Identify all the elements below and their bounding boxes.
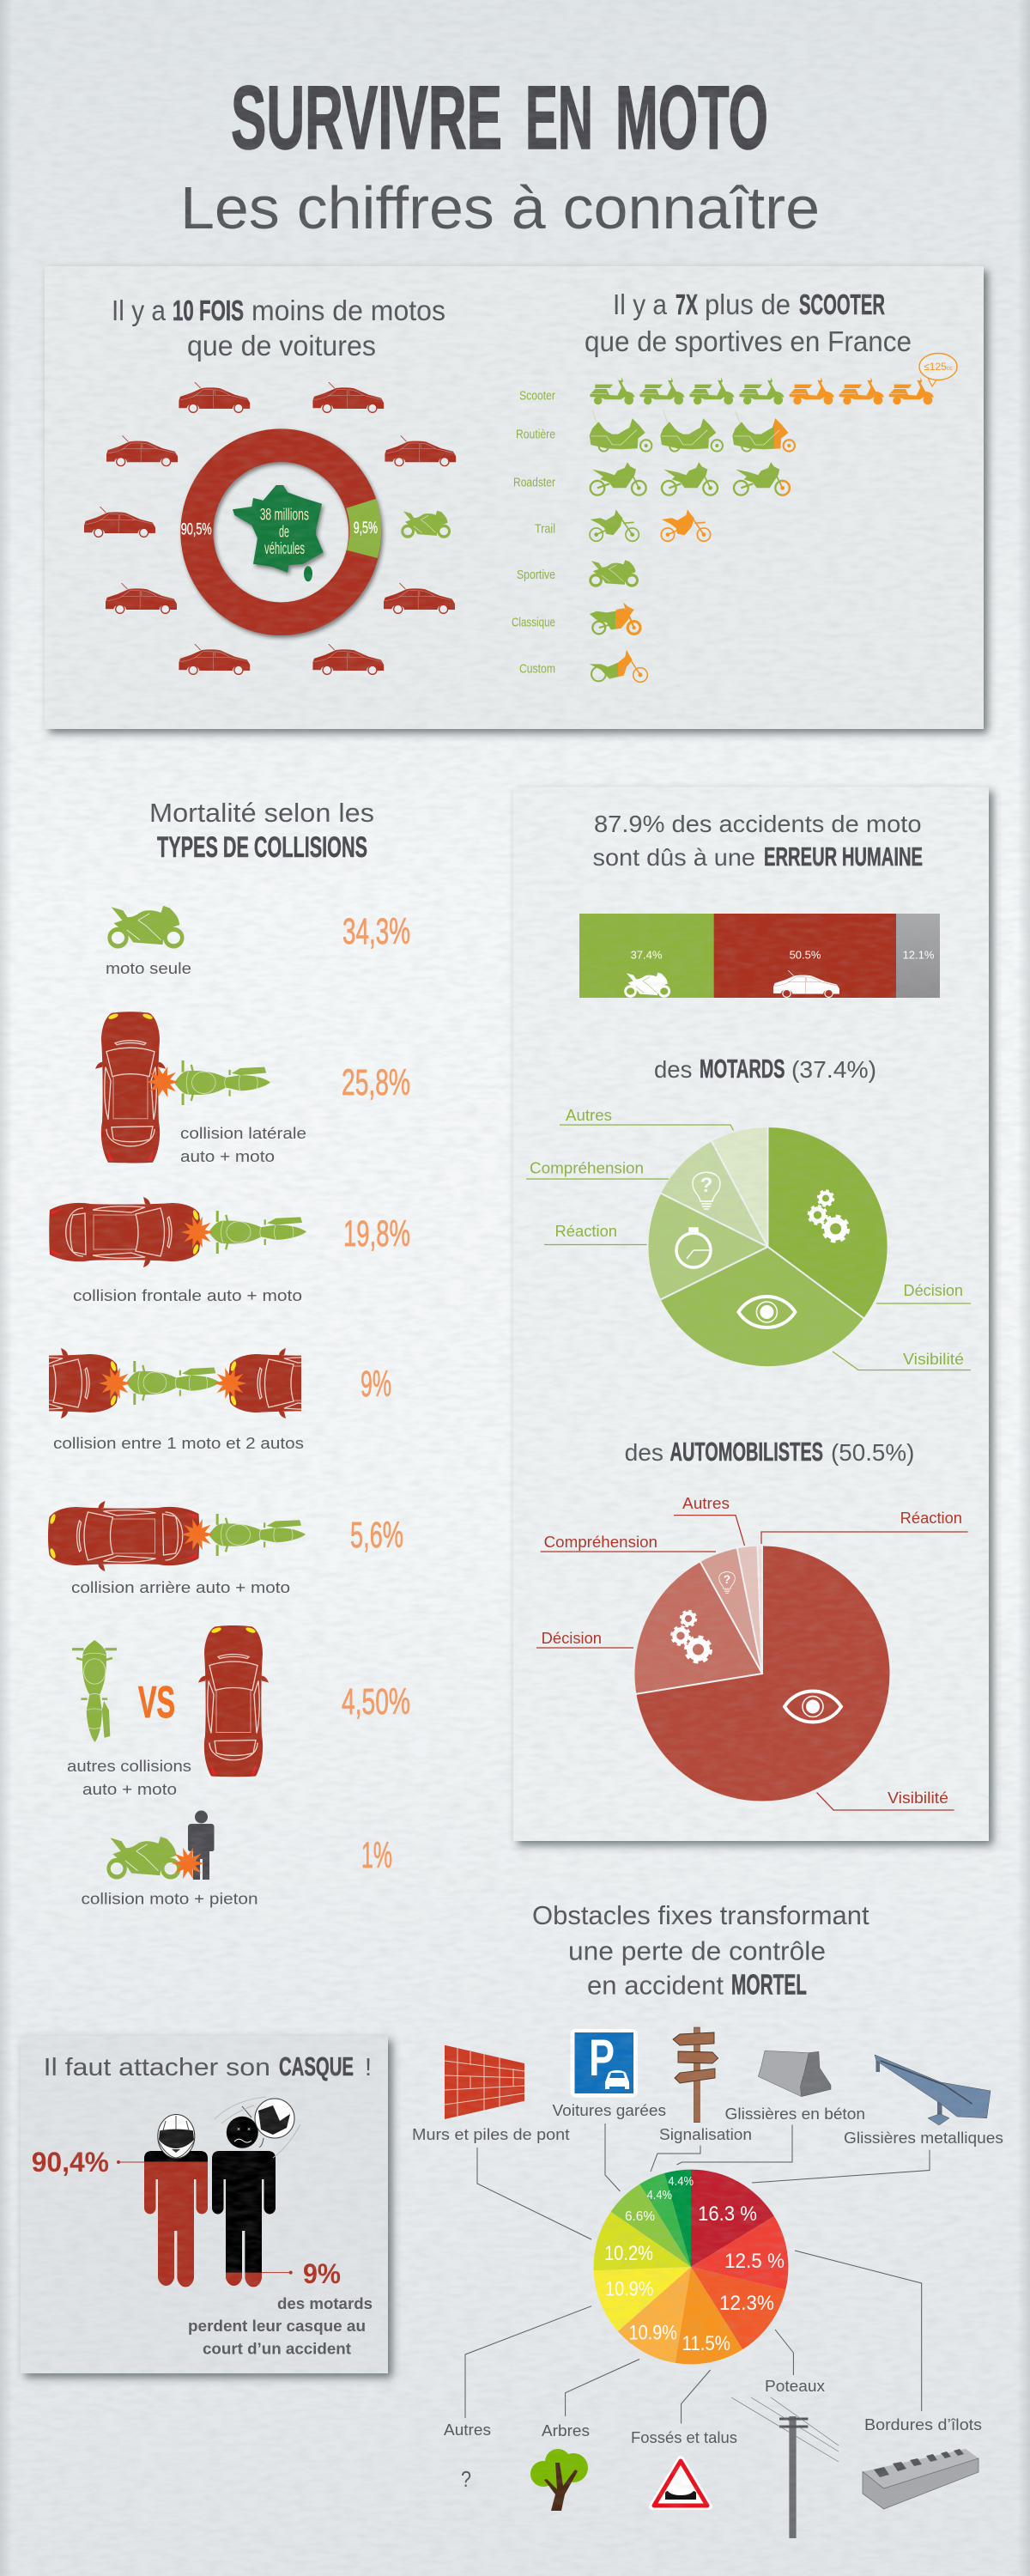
row: collision arrière [48,1501,403,1596]
map: France: de [279,524,289,542]
figure: motard sans casque: × [237,2127,240,2133]
labels: automobilistes pie: Visibilité [888,1789,948,1807]
heading: 7X scooter: SCOOTER [799,289,885,320]
row: Roadster [513,462,790,495]
labels: motards pie: Autres [566,1107,612,1124]
heading: 7X scooter: plus de [705,289,791,320]
stacked bar: 12.1% [903,948,935,962]
pie chart: obstacles: 10.2% [604,2242,653,2265]
row: autres collisions: autres collisions [67,1758,191,1775]
icon: signpost [673,2027,718,2123]
heading: casque: Il faut attacher son [44,2054,270,2081]
labels: obstacles: Signalisation [659,2126,752,2143]
row: autres collisions [67,1625,410,1798]
pie chart: motards [647,1127,888,1367]
map: France: véhicules [264,540,305,558]
map: France [233,485,324,581]
heading: 10 fois [112,295,445,361]
row: 1 moto et 2 autos [49,1348,391,1449]
row: 1 moto et 2 autos: collision entre 1 moto et 2 autos [53,1435,304,1452]
heading: motards: MOTARDS [700,1054,785,1084]
icon: tree [530,2449,588,2511]
row: autres collisions: VS [138,1678,175,1728]
heading: casque [44,2051,372,2081]
donut chart [180,428,381,635]
row: Routière: Routière [516,428,555,442]
labels: automobilistes pie: Réaction [900,1510,962,1527]
labels: obstacles: Glissières en béton [724,2105,865,2123]
pie chart: obstacles: 4.4% [668,2174,694,2189]
section: obstacles fixes [412,1900,1003,2538]
text: perdent leur casque [188,2295,373,2358]
row: collision frontale [49,1197,410,1304]
row: Custom: Custom [519,661,555,676]
row: collision frontale: collision frontale auto + moto [73,1287,302,1304]
icons: cars around the donut [84,382,456,674]
heading: obstacles: MORTEL [731,1968,807,2001]
labels: obstacles: Autres [444,2421,491,2439]
row: collision latérale: collision latérale [180,1125,306,1142]
row: Sportive: Sportive [517,568,555,582]
title: EN [525,68,593,168]
row: moto seule [106,906,410,977]
row: Trail [535,509,711,541]
title: MOTO [615,68,768,168]
figure: motard sans casque [212,2097,300,2287]
row: moto + pieton: 1% [361,1835,392,1876]
row: Classique: Classique [512,615,555,629]
heading: casque: CASQUE [279,2051,354,2081]
row: collision frontale: 19,8% [343,1213,410,1255]
stacked bar: 37.4% [631,948,663,962]
callout: 125cc [919,354,957,386]
heading: motards [654,1054,876,1084]
row: Scooter [519,377,934,404]
icons: automobilistes pie [672,1572,841,1722]
text: perdent leur casque: des motards [277,2295,373,2312]
heading: obstacles [532,1900,869,2001]
pie chart: obstacles: 12.5 % [724,2250,785,2273]
pie chart: obstacles: 10.9% [628,2322,677,2344]
heading: 7X scooter: que de sportives en France [585,325,912,357]
stat: 9%: 9% [303,2258,341,2289]
heading: automobilistes: (50.5%) [831,1439,914,1466]
callout: 125cc: ≤125cc [924,361,953,373]
heading: 7X scooter [585,289,912,357]
stat: 9% [262,2258,341,2289]
pie chart: obstacles: 11.5% [682,2332,730,2355]
labels: obstacles [412,2102,1003,2492]
pie chart: obstacles: 6.6% [625,2209,655,2224]
stacked bar: 50.5% [790,948,821,962]
labels: obstacles: Fossés et talus [631,2429,737,2446]
icon: warning sign [652,2459,709,2506]
labels: motards pie: Compréhension [530,1159,644,1176]
text: perdent leur casque: court d’un accident [203,2341,351,2358]
heading: obstacles: en accident [587,1970,724,2001]
labels: motards pie: Décision [903,1282,963,1299]
figure: motard sans casque: × [247,2127,251,2133]
labels: motards pie: Réaction [554,1223,617,1240]
icon: curb [863,2449,978,2509]
labels: automobilistes pie: Autres [682,1495,730,1512]
row: Routière [516,410,795,452]
labels: automobilistes pie: Compréhension [544,1534,657,1551]
heading: erreur humaine: ERREUR HUMAINE [764,841,923,872]
row: collision latérale [95,1012,410,1165]
row: collision latérale: auto + moto [180,1148,275,1165]
pie chart: obstacles: 10.9% [605,2277,654,2301]
heading: obstacles: Obstacles fixes transformant [532,1900,869,1930]
heading: obstacles: une perte de contrôle [568,1936,826,1966]
panel: erreur humaine [513,787,989,1841]
heading: automobilistes: des [625,1439,663,1466]
row: Classique [512,603,640,634]
row: collision latérale: 25,8% [342,1062,410,1103]
leader lines: obstacles [465,2123,930,2423]
stat: 90,4%: 90,4% [32,2147,109,2178]
icon: wall [445,2045,524,2119]
row: Trail: Trail [535,522,555,537]
labels: obstacles: Poteaux [765,2378,825,2395]
row: autres collisions: auto + moto [82,1781,177,1798]
icon: utility pole [731,2397,839,2538]
heading: motards: (37.4%) [791,1056,876,1083]
pie chart: obstacles: 12.3% [719,2292,774,2315]
panel: motos vs voitures [45,266,984,729]
labels: automobilistes pie: Décision [542,1630,602,1647]
labels: obstacles: Voitures garées [553,2102,666,2119]
pie chart: obstacles: 4.4% [647,2188,672,2202]
heading: casque: ! [365,2054,372,2081]
row: 1 moto et 2 autos: 9% [360,1364,391,1405]
panel: casque [21,2036,388,2373]
row: Scooter: Scooter [519,389,555,404]
heading: 10 fois: Il y a [112,295,167,326]
icon: concrete barrier [758,2050,831,2097]
heading: automobilistes: AUTOMOBILISTES [670,1437,823,1467]
labels: obstacles: Glissières metalliques [844,2129,1003,2147]
heading: erreur humaine: 87.9% des accidents de moto [594,811,922,837]
text: perdent leur casque: perdent leur casque au [188,2318,366,2335]
figure: motard avec casque [144,2114,208,2287]
labels: motards pie [526,1107,971,1370]
icon: motorcycle [403,511,450,537]
labels: obstacles: Bordures d’îlots [864,2416,982,2433]
row: collision arrière: collision arrière auto + moto [71,1579,290,1596]
heading: 10 fois: que de voitures [187,330,376,361]
row: moto + pieton [81,1810,392,1908]
section: types de collisions [48,802,410,1908]
labels: obstacles: Murs et piles de pont [412,2126,570,2143]
heading: collisions: Mortalité selon les [149,798,374,828]
labels: obstacles: ? [461,2466,471,2492]
pie chart: automobilistes [633,1546,890,1801]
heading: 10 fois: moins de motos [251,295,445,326]
donut chart: 90,5% [181,521,212,539]
row: collision arrière: 5,6% [350,1515,403,1556]
icon: metal barrier [875,2055,991,2125]
heading: collisions [149,798,374,864]
heading: erreur humaine: sont dûs à une [592,844,755,871]
labels: motards pie: Visibilité [903,1351,964,1368]
labels: automobilistes pie [536,1495,968,1810]
heading: collisions: TYPES DE COLLISIONS [157,831,367,864]
heading: 7X scooter: 7X [676,289,698,320]
heading: erreur humaine [592,811,923,872]
row: moto + pieton: collision moto + pieton [81,1891,258,1908]
row: Sportive [517,560,638,586]
row: Roadster: Roadster [513,476,555,490]
heading: 10 fois: 10 FOIS [173,295,244,326]
subtitle: Les chiffres à connaître [180,174,820,241]
heading: motards: des [654,1056,692,1083]
icon: parking sign: P [589,2029,615,2087]
row: autres collisions: 4,50% [342,1681,410,1722]
stacked bar [579,914,940,998]
icons: motards pie [676,1172,848,1327]
stat: 90,4% [32,2147,144,2178]
map: France: 38 millions [260,507,309,525]
title: SURVIVRE [231,68,502,168]
labels: obstacles: Arbres [542,2422,590,2439]
row: moto seule: moto seule [106,960,191,977]
row: moto seule: 34,3% [342,911,410,952]
heading: 7X scooter: Il y a [613,289,668,320]
pie chart: obstacles: 16.3 % [698,2202,757,2226]
row: Custom [519,650,647,682]
donut chart: 9,5% [354,519,378,538]
pie chart: obstacles [594,2170,788,2364]
icon: parking sign [570,2029,638,2098]
